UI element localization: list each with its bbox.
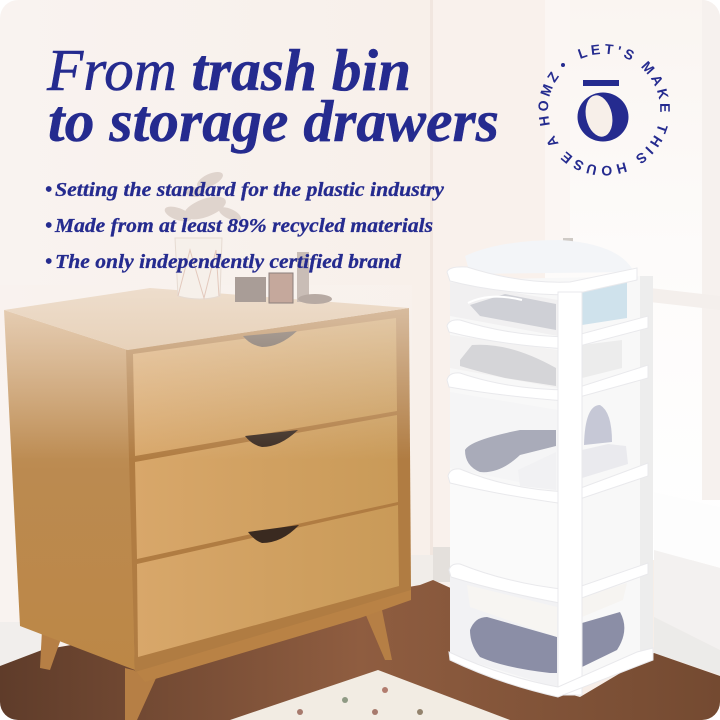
bullet list: •: [45, 215, 52, 237]
patterned rug: [230, 670, 510, 720]
bullet list: [45, 179, 445, 273]
skirting boards and window sill: [430, 547, 720, 674]
top fade overlay on dresser: [4, 288, 410, 447]
bullet list: The only independently certified brand: [55, 251, 402, 273]
metal pole tip: [563, 238, 573, 242]
headline: [46, 37, 499, 154]
headline: to storage drawers: [48, 88, 499, 154]
cosmetics on dresser: [235, 252, 332, 304]
drawer 1: [470, 282, 627, 330]
headline: From trash bin: [46, 37, 411, 103]
bullet list: •: [45, 179, 52, 201]
rear post: [640, 276, 653, 660]
circular tagline: LET'S MAKE THIS HOUSE A HOMZ: [538, 44, 670, 176]
dresser rear and front legs: [40, 600, 392, 720]
dresser side: [4, 310, 135, 670]
white plastic rims and posts: [447, 267, 653, 697]
wooden dresser: [4, 288, 411, 720]
drawer 2: [460, 340, 622, 386]
drawer 1: [133, 318, 397, 456]
tower backing: [450, 278, 640, 682]
dresser top: [4, 288, 409, 350]
drawer 3: [137, 505, 399, 657]
dresser front frame: [126, 308, 411, 672]
bullet list: Made from at least 89% recycled materials: [54, 215, 433, 237]
drawer 5: [470, 612, 624, 673]
dresser base rail: [135, 588, 411, 682]
drawer 2: [135, 415, 398, 559]
vase with plant: [163, 169, 243, 299]
bullet list: Setting the standard for the plastic industry: [55, 179, 445, 201]
drawer 4: [450, 480, 558, 590]
plastic storage drawer tower: [447, 238, 653, 697]
wooden floor: [0, 580, 720, 720]
logo mark: [578, 80, 628, 142]
drawer handles: [243, 331, 299, 543]
bullet list: •: [45, 251, 52, 273]
logo badge: [538, 44, 670, 176]
drawer 3: [465, 405, 628, 478]
towel stack on top: [465, 240, 634, 274]
